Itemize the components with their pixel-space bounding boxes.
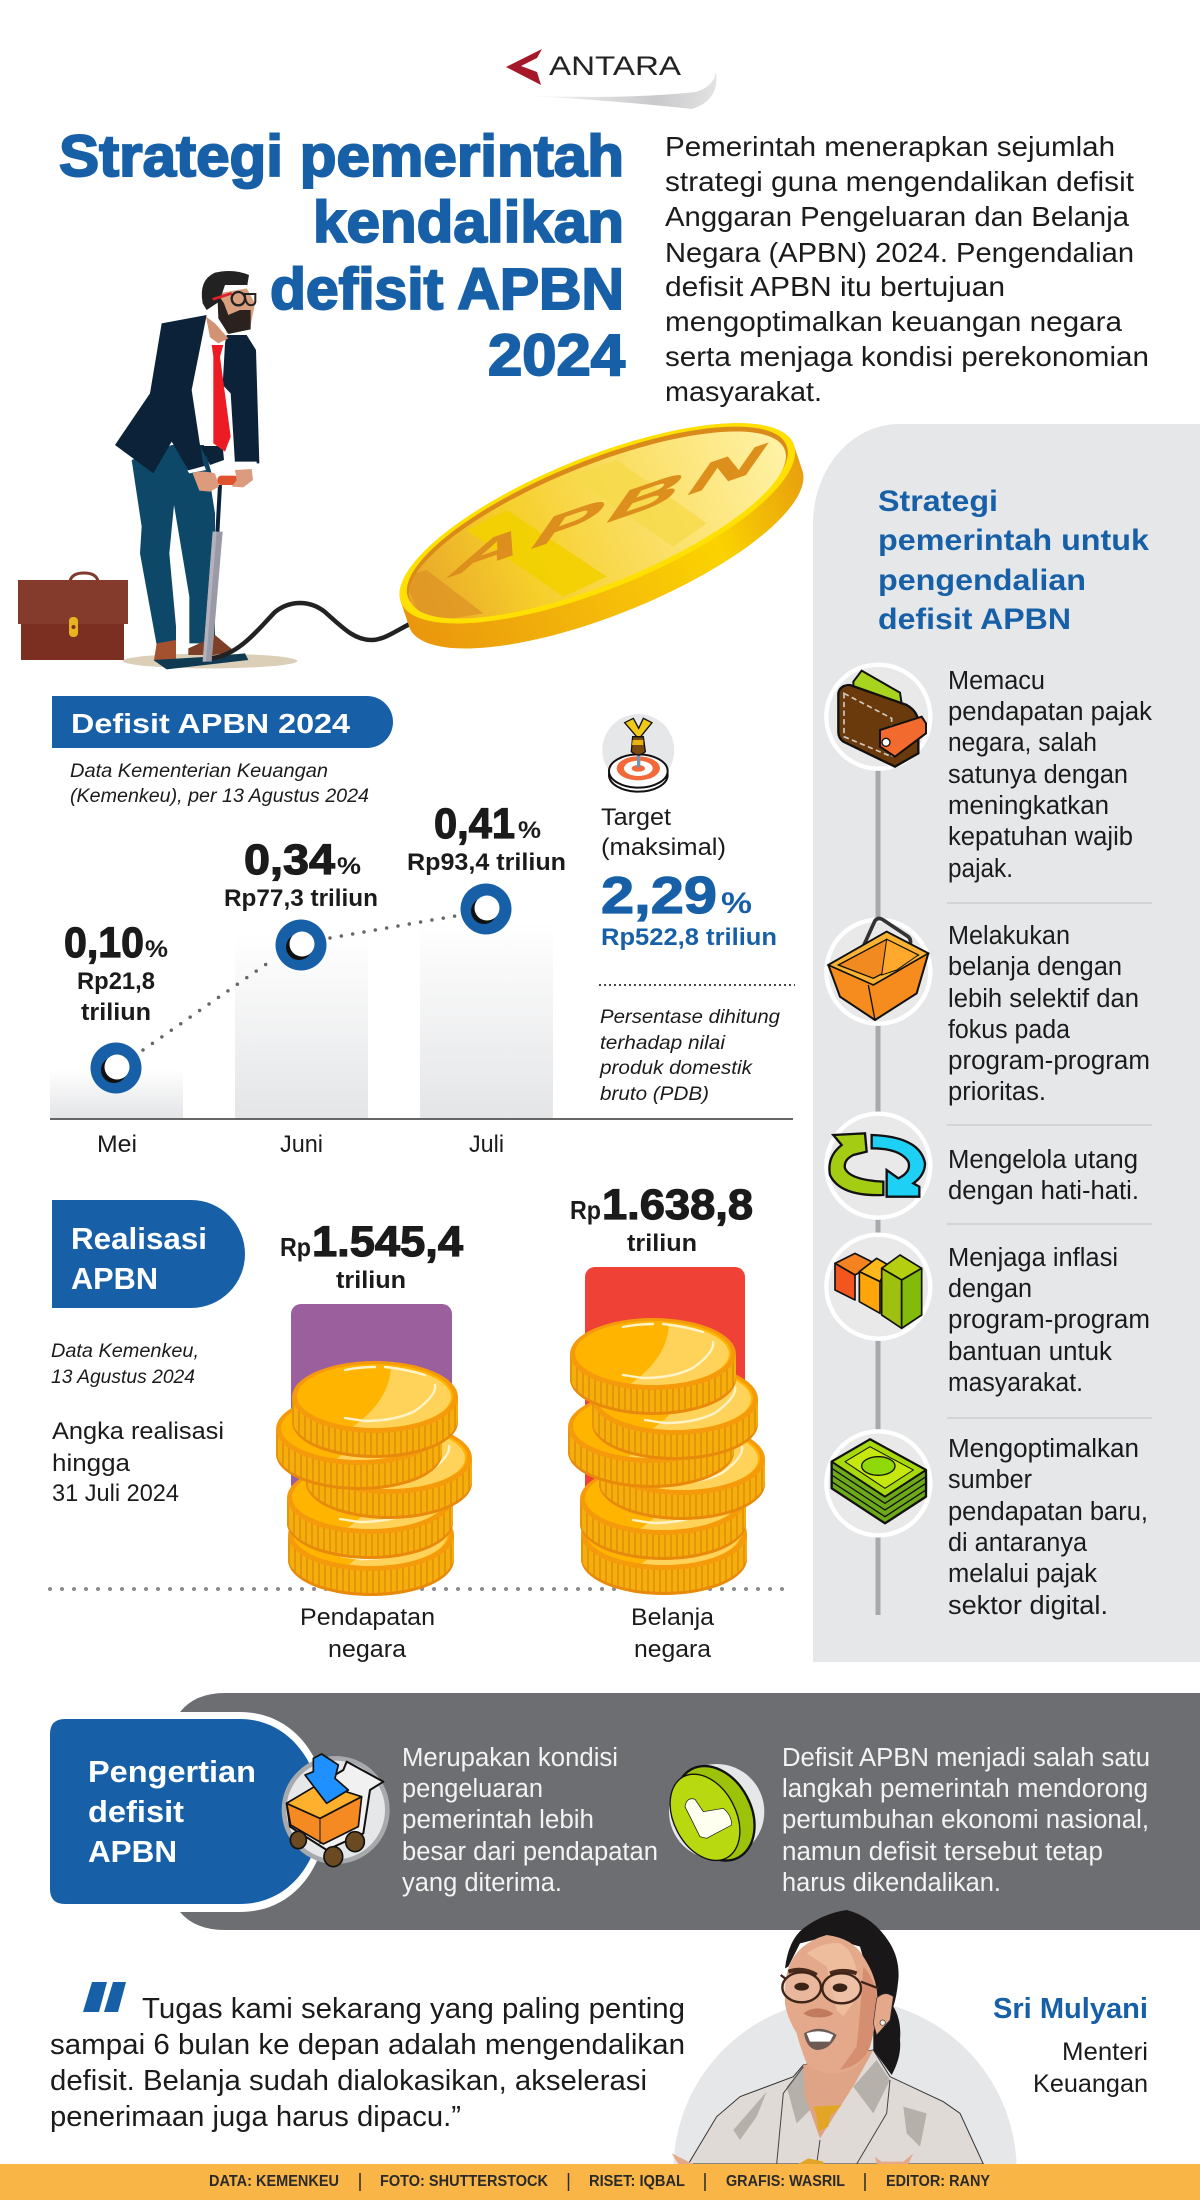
value: Mei: 0,10: [64, 919, 144, 967]
text: strategy 1: pajak.: [948, 855, 1013, 883]
text: strategy 1: meningkatkan: [948, 792, 1109, 820]
text: definition: Merupakan kondisi: [402, 1744, 618, 1772]
value: Juli: 0,41: [434, 800, 515, 848]
axis labels: Mei: [97, 1131, 137, 1158]
value: belanja: Rp: [570, 1195, 601, 1225]
heading: Defisit APBN 2024: Defisit APBN 2024: [71, 708, 350, 739]
panel: Pengertian defisit APBN: [50, 1712, 327, 1912]
illustration: APBN coin: [400, 423, 804, 648]
value: Mei: [64, 919, 168, 1026]
value: Juli: [407, 800, 566, 876]
value: belanja: [570, 1181, 753, 1257]
chart: monthly deficit: [50, 800, 793, 1158]
source note: Kemenkeu: (Kemenkeu), per 13 Agustus 2024: [70, 786, 369, 807]
text: strategy 2: belanja dengan: [948, 953, 1122, 981]
target text: Rp522,8 triliun: [601, 924, 777, 951]
portrait: Sri Mulyani: [672, 1910, 1017, 2164]
text: strategy 1: kepatuhan wajib: [948, 823, 1133, 851]
value: Juli: Rp93,4 triliun: [407, 849, 566, 876]
marker: Juni: [276, 920, 326, 970]
logo: ANTARA: ANTARA: [549, 51, 681, 81]
title: defisit APBN: [270, 257, 624, 322]
icon: quote mark: [83, 1982, 126, 2012]
text: definition: pemerintah lebih: [402, 1806, 594, 1834]
panel heading: strategy: defisit APBN: [878, 603, 1071, 636]
text: strategy 5: melalui pajak: [948, 1560, 1097, 1588]
panel heading: strategy: Strategi: [878, 485, 998, 518]
quote text: defisit. Belanja sudah dialokasikan, akselerasi: [50, 2065, 647, 2097]
source note: realisasi: 13 Agustus 2024: [51, 1367, 195, 1388]
note: PDB: terhadap nilai: [600, 1033, 726, 1054]
text: strategy 5: di antaranya: [948, 1529, 1088, 1557]
panel heading: strategy: pemerintah untuk: [878, 524, 1149, 557]
text: strategy 3: Mengelola utang: [948, 1146, 1138, 1174]
text: strategy 4: dengan: [948, 1275, 1032, 1303]
intro text: Negara (APBN) 2024. Pengendalian: [665, 237, 1134, 268]
label: belanja: negara: [634, 1636, 712, 1663]
note: PDB: produk domestik: [599, 1058, 754, 1079]
text: strategy 2: prioritas.: [948, 1078, 1046, 1106]
text: strategy 3: dengan hati-hati.: [948, 1177, 1139, 1205]
text: strategy 4: masyarakat.: [948, 1369, 1083, 1397]
text: strategy 1: satunya dengan: [948, 761, 1128, 789]
attribution: Sri Mulyani: [993, 1993, 1148, 2098]
text: deficit role: langkah pemerintah mendorong: [782, 1775, 1148, 1803]
heading: Realisasi APBN: APBN: [71, 1261, 158, 1296]
title: 2024: [488, 323, 625, 388]
text: strategy 5: pendapatan baru,: [948, 1498, 1148, 1526]
illustration: hose: [212, 603, 414, 658]
intro text: Pemerintah menerapkan sejumlah: [665, 131, 1115, 162]
source note: realisasi: hingga: [52, 1450, 131, 1477]
value: Mei: %: [145, 936, 168, 963]
note: PDB: bruto (PDB): [600, 1084, 709, 1105]
value: Juni: Rp77,3 triliun: [224, 885, 378, 912]
icon: wallet: [826, 665, 930, 769]
text: strategy 4: program-program: [948, 1306, 1150, 1334]
target text: (maksimal): [601, 834, 726, 861]
text: strategy 5: sektor digital.: [948, 1592, 1108, 1620]
marker: Mei: [90, 1042, 142, 1094]
value: pendapatan: Rp: [280, 1232, 311, 1262]
text: strategy 2: fokus pada: [948, 1016, 1071, 1044]
title: [59, 124, 625, 388]
text: definition: besar dari pendapatan: [402, 1838, 658, 1866]
intro text: [665, 131, 1149, 407]
value: Juli: %: [518, 817, 541, 844]
quote text: Tugas kami sekarang yang paling penting: [142, 1993, 685, 2025]
label: pendapatan: Pendapatan: [300, 1604, 435, 1631]
icon: money stack: [826, 1431, 930, 1535]
text: strategy 4: Menjaga inflasi: [948, 1244, 1118, 1272]
icon: cart with arrow: [284, 1754, 387, 1867]
value: Juni: 0,34: [244, 836, 335, 884]
icon: dart target: [602, 714, 674, 792]
text: strategy 5: Mengoptimalkan: [948, 1435, 1139, 1463]
text: strategy 5: sumber: [948, 1466, 1032, 1494]
value: Mei: Rp21,8: [77, 968, 155, 995]
text: deficit role: harus dikendalikan.: [782, 1869, 1001, 1897]
text: strategy 4: [948, 1244, 1150, 1397]
value: pendapatan: triliun: [336, 1267, 406, 1294]
logo: ANTARA: [506, 49, 716, 109]
text: strategy 1: Memacu: [948, 667, 1045, 695]
note: PDB: Persentase dihitung: [600, 1007, 780, 1028]
footer credits: RISET: IQBAL: [589, 2173, 685, 2190]
panel background: strategy: [813, 424, 1200, 1662]
label: pendapatan: [300, 1604, 435, 1663]
panel: Pengertian defisit APBN: Pengertian: [88, 1754, 256, 1789]
source note: realisasi: Data Kemenkeu,: [51, 1341, 199, 1362]
text: strategy 1: pendapatan pajak: [948, 698, 1152, 726]
source note: realisasi: [51, 1341, 224, 1507]
text: definition: [402, 1744, 658, 1897]
panel heading: strategy: pengendalian: [878, 564, 1086, 597]
heading: Realisasi APBN: Realisasi: [71, 1221, 207, 1256]
axis labels: [97, 1131, 504, 1158]
attribution: Sri Mulyani: Menteri: [1062, 2038, 1148, 2066]
band: definition background: [180, 1693, 1200, 1930]
attribution: Sri Mulyani: Keuangan: [1033, 2070, 1148, 2098]
value: Juni: [224, 836, 378, 912]
value: Juni: %: [337, 853, 361, 880]
panel: Pengertian defisit APBN: APBN: [88, 1834, 177, 1869]
icon: recycle arrows: [826, 1114, 930, 1218]
chart: belanja negara: [568, 1181, 772, 1663]
footer credits: EDITOR: RANY: [886, 2173, 991, 2190]
text: strategy 1: [948, 667, 1152, 883]
heading: Realisasi APBN: [52, 1200, 245, 1308]
label: belanja: [631, 1604, 715, 1663]
axis labels: Juni: [280, 1131, 323, 1158]
text: deficit role: namun defisit tersebut tetap: [782, 1838, 1103, 1866]
value: pendapatan: 1.545,4: [312, 1218, 463, 1266]
illustration: briefcase: [18, 573, 128, 660]
panel: Pengertian defisit APBN: defisit: [88, 1794, 184, 1829]
icon: green check coin: [656, 1752, 770, 1874]
target text: [601, 804, 777, 951]
footer credits: FOTO: SHUTTERSTOCK: [380, 2173, 549, 2190]
text: strategy 5: [948, 1435, 1148, 1620]
attribution: Sri Mulyani: Sri Mulyani: [993, 1993, 1148, 2025]
footer credits: DATA: KEMENKEU: [209, 2173, 339, 2190]
quote text: penerimaan juga harus dipacu.”: [50, 2101, 461, 2133]
intro text: defisit APBN itu bertujuan: [665, 271, 1005, 302]
value: pendapatan: [280, 1218, 463, 1294]
value: belanja: 1.638,8: [602, 1181, 753, 1229]
value: belanja: triliun: [627, 1230, 697, 1257]
footer credits: GRAFIS: WASRIL: [726, 2173, 845, 2190]
target text: %: [721, 887, 752, 920]
text: deficit role: Defisit APBN menjadi salah satu: [782, 1744, 1150, 1772]
value: Mei: triliun: [81, 999, 151, 1026]
text: strategy 3: [948, 1146, 1139, 1205]
illustration: man with pump: [115, 271, 297, 669]
text: strategy 1: negara, salah: [948, 729, 1097, 757]
title: kendalikan: [313, 190, 624, 255]
note: PDB: [599, 1007, 780, 1105]
source note: realisasi: Angka realisasi: [52, 1418, 224, 1445]
text: strategy 2: Melakukan: [948, 922, 1070, 950]
text: definition: pengeluaran: [402, 1775, 543, 1803]
label: belanja: Belanja: [631, 1604, 715, 1631]
text: strategy 2: [948, 922, 1150, 1106]
label: pendapatan: negara: [328, 1636, 407, 1663]
text: deficit role: [782, 1744, 1150, 1897]
quote text: [50, 1993, 685, 2133]
icon: basket: [826, 918, 930, 1024]
source note: realisasi: 31 Juli 2024: [52, 1480, 179, 1507]
title: Strategi pemerintah: [59, 124, 624, 189]
quote text: sampai 6 bulan ke depan adalah mengendalikan: [50, 2029, 685, 2061]
panel heading: strategy: [878, 485, 1149, 636]
text: definition: yang diterima.: [402, 1869, 562, 1897]
text: strategy 2: lebih selektif dan: [948, 985, 1139, 1013]
source note: Kemenkeu: [70, 761, 369, 807]
text: strategy 4: bantuan untuk: [948, 1338, 1112, 1366]
icon: bar blocks: [826, 1235, 930, 1339]
text: strategy 2: program-program: [948, 1047, 1150, 1075]
intro text: masyarakat.: [665, 376, 822, 407]
target text: Target: [601, 804, 671, 831]
chart: pendapatan negara: [276, 1218, 479, 1663]
intro text: serta menjaga kondisi perekonomian: [665, 341, 1149, 372]
target text: 2,29: [601, 867, 717, 925]
source note: Kemenkeu: Data Kementerian Keuangan: [70, 761, 328, 782]
intro text: mengoptimalkan keuangan negara: [665, 306, 1122, 337]
intro text: Anggaran Pengeluaran dan Belanja: [665, 201, 1129, 232]
intro text: strategi guna mengendalikan defisit: [665, 166, 1134, 197]
heading: Defisit APBN 2024: [52, 696, 393, 748]
footer credits: [0, 2164, 1200, 2200]
illustration: APBN coin: APBN: [438, 432, 780, 588]
text: deficit role: pertumbuhan ekonomi nasional,: [782, 1806, 1149, 1834]
marker: Juli: [460, 884, 512, 934]
axis labels: Juli: [469, 1131, 504, 1158]
